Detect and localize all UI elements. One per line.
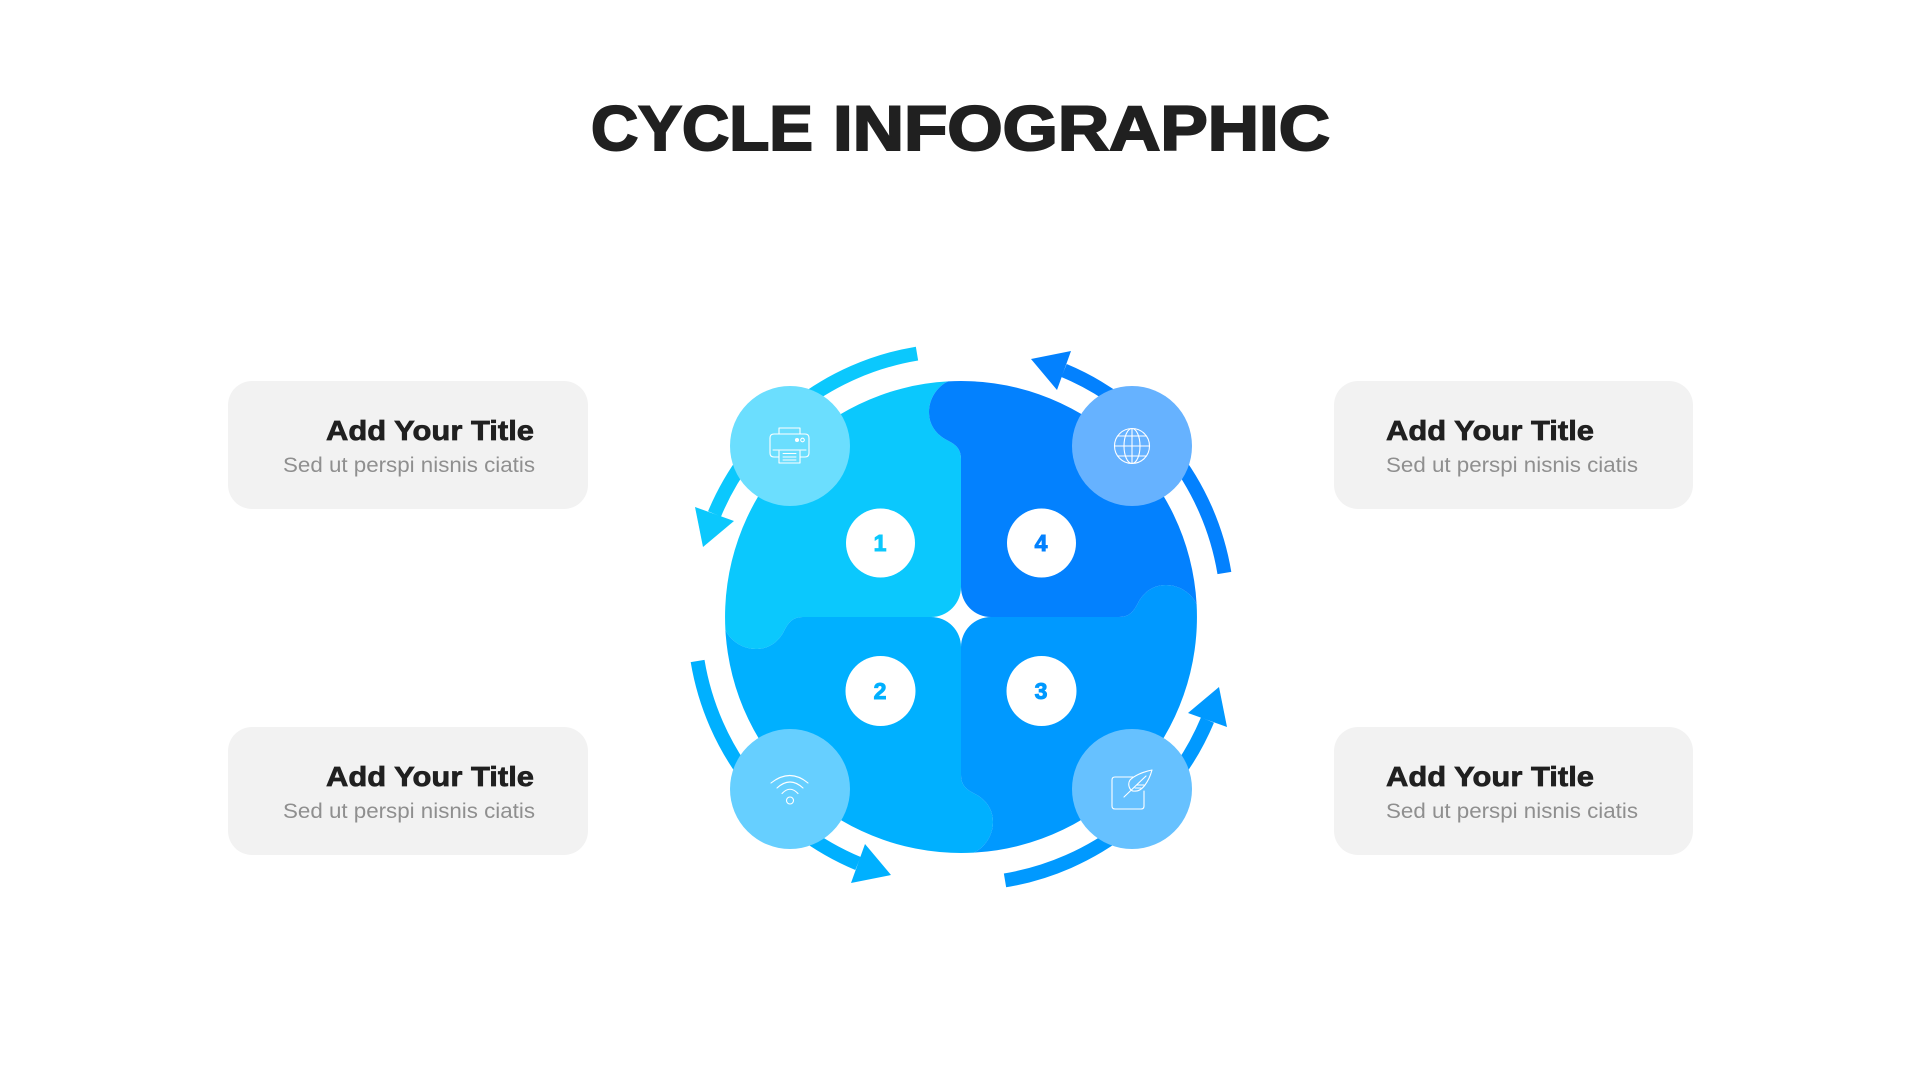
card: top right: Sed ut perspi nisnis ciatis — [1386, 454, 1638, 477]
card: top left — [228, 381, 588, 509]
card: bottom right: Sed ut perspi nisnis ciatis — [1386, 800, 1638, 823]
number badge 2: 2 — [874, 678, 886, 704]
puzzle piece 3 — [961, 585, 1197, 853]
number badge 3: 3 — [1035, 678, 1047, 704]
arrow: segment 2 — [698, 661, 891, 883]
title: CYCLE — [591, 94, 813, 164]
icon: wifi — [730, 729, 850, 849]
puzzle piece 4 — [929, 381, 1197, 617]
arrow: segment 1 — [695, 354, 917, 547]
number badge 4: 4 — [1035, 530, 1048, 556]
number badge 4 — [1007, 508, 1076, 578]
card: top left: Add Your Title — [326, 415, 534, 446]
title — [591, 94, 1330, 164]
icon: note with feather — [1072, 729, 1192, 849]
card: top right — [1334, 381, 1693, 509]
number badge 2 — [846, 656, 916, 726]
puzzle circle — [725, 381, 1197, 853]
title: INFOGRAPHIC — [833, 94, 1330, 164]
number badge 1 — [846, 508, 915, 578]
card: bottom left: Sed ut perspi nisnis ciatis — [283, 800, 535, 823]
icon: printer — [730, 386, 850, 506]
card: bottom right: Add Your Title — [1386, 761, 1594, 792]
card: bottom right — [1334, 727, 1693, 855]
card: top right: Add Your Title — [1386, 415, 1594, 446]
puzzle piece 2 — [725, 617, 993, 853]
card: bottom left: Add Your Title — [326, 761, 534, 792]
puzzle piece 1 — [725, 381, 961, 649]
card: top left: Sed ut perspi nisnis ciatis — [283, 454, 535, 477]
card: bottom left — [228, 727, 588, 855]
arrow: segment 4 — [1031, 351, 1224, 573]
number badge 3 — [1006, 656, 1076, 726]
arrow: segment 3 — [1005, 687, 1227, 880]
number badge 1: 1 — [874, 530, 887, 556]
icon: globe — [1072, 386, 1192, 506]
